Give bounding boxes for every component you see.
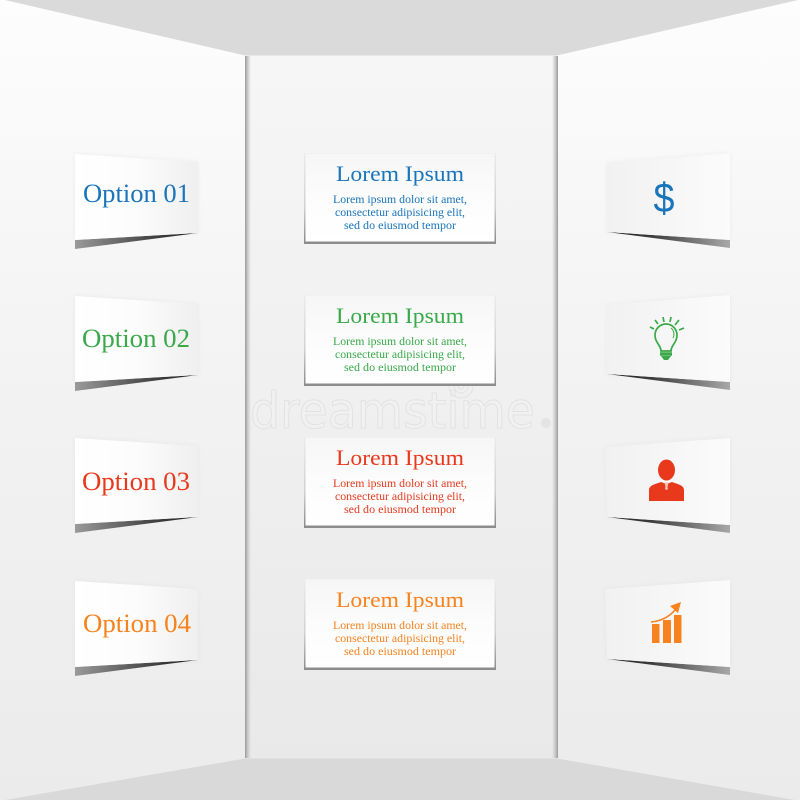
- left wall: [0, 0, 246, 800]
- panel: text block 1: [304, 153, 496, 244]
- option 04 card: [75, 581, 198, 667]
- dollar card: [607, 153, 730, 240]
- heading 1: Lorem Ipsum: [336, 161, 464, 186]
- option 01 label: Option 01: [83, 179, 190, 208]
- heading 4: Lorem Ipsum: [336, 587, 464, 612]
- person card: [605, 438, 730, 525]
- icon: person: [649, 460, 684, 501]
- body text 1: consectetur adipisicing elit,: [335, 207, 465, 219]
- bulb card: [605, 295, 730, 382]
- body text 3: [333, 478, 467, 516]
- option 04 label: Option 04: [83, 609, 191, 638]
- left groove: [245, 56, 251, 758]
- panel: text block 2: [304, 295, 496, 386]
- icon: dollar: $: [654, 174, 674, 221]
- option 02 card: [75, 296, 198, 382]
- panel: text block 3: [304, 437, 496, 528]
- body text 3: sed do eiusmod tempor: [344, 504, 456, 516]
- panel: dollar card: [607, 153, 730, 248]
- panel: bulb card: [605, 295, 730, 390]
- ceiling: [5, 0, 798, 56]
- floor: [5, 758, 795, 800]
- option 03 label: Option 03: [82, 467, 190, 496]
- body text 3: consectetur adipisicing elit,: [335, 491, 465, 503]
- chart card: [605, 580, 730, 667]
- panel: option 02: [75, 296, 198, 391]
- center wall: [246, 55, 555, 759]
- dollar fold shadow: [607, 232, 730, 248]
- chart fold shadow: [607, 659, 730, 675]
- option 02 label: Option 02: [82, 324, 190, 353]
- option 04 fold shadow: [75, 660, 198, 676]
- panel: option 03: [75, 438, 198, 533]
- watermark: dreamstime: [250, 382, 535, 440]
- icon: light bulb: [650, 317, 684, 360]
- body text 2: consectetur adipisicing elit,: [335, 349, 465, 361]
- right wall: [555, 0, 800, 800]
- icon: bar chart with arrow: [651, 602, 682, 643]
- body text 4: consectetur adipisicing elit,: [335, 633, 465, 645]
- body text 4: [333, 620, 467, 658]
- bulb fold shadow: [607, 374, 730, 390]
- body text 2: sed do eiusmod tempor: [344, 362, 456, 374]
- panel: text block 4: [304, 579, 496, 670]
- option 02 fold shadow: [75, 375, 198, 391]
- panel: option 01: [75, 154, 198, 249]
- option 03 fold shadow: [75, 517, 198, 533]
- right groove: [552, 56, 558, 758]
- body text 1: Lorem ipsum dolor sit amet,: [333, 194, 467, 206]
- panel: person card: [605, 438, 730, 533]
- body text 2: Lorem ipsum dolor sit amet,: [333, 336, 467, 348]
- body text 4: Lorem ipsum dolor sit amet,: [333, 620, 467, 632]
- heading 3: Lorem Ipsum: [336, 445, 464, 470]
- option 01 card: [75, 154, 198, 240]
- panel: option 04: [75, 581, 198, 676]
- body text 1: [333, 194, 467, 232]
- option 01 fold shadow: [75, 233, 198, 249]
- body text 3: Lorem ipsum dolor sit amet,: [333, 478, 467, 490]
- heading 2: Lorem Ipsum: [336, 303, 464, 328]
- panel: chart card: [605, 580, 730, 675]
- body text 1: sed do eiusmod tempor: [344, 220, 456, 232]
- option 03 card: [75, 438, 198, 524]
- person fold shadow: [607, 517, 730, 533]
- body text 4: sed do eiusmod tempor: [344, 646, 456, 658]
- body text 2: [333, 336, 467, 374]
